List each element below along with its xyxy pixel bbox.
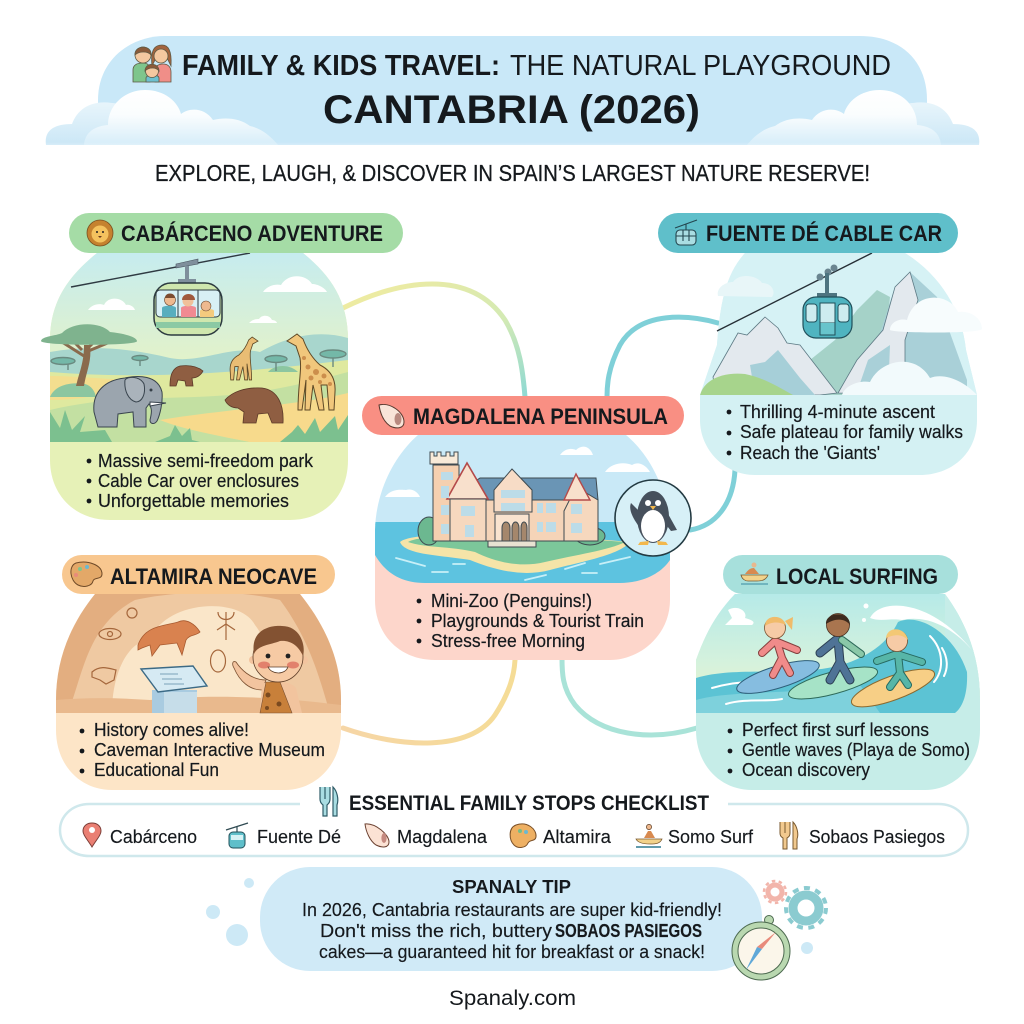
title line 1 light: THE NATURAL PLAYGROUND (510, 50, 891, 82)
scene: cave (56, 592, 341, 713)
icon: big bear (225, 388, 283, 423)
clouds: banner right (747, 90, 979, 145)
heading pill: ALTAMIRA NEOCAVE (110, 564, 317, 589)
bullet list: Cable Car over enclosures (98, 471, 299, 491)
item: Magdalena: Magdalena (397, 827, 488, 847)
icon: gondola (717, 253, 872, 338)
title banner (40, 36, 985, 154)
tip text: In 2026, Cantabria restaurants are super kid-friendly! (302, 900, 722, 920)
item: Altamira (510, 824, 612, 847)
bullet list: Reach the 'Giants' (740, 443, 880, 463)
icon: surfer girl (762, 617, 797, 675)
heading pill (69, 213, 403, 253)
bullet list (727, 402, 963, 463)
bullet list: Massive semi-freedom park (98, 451, 314, 471)
icon: surfer boy (820, 614, 861, 680)
icon: big giraffe (287, 334, 335, 410)
bullet list (417, 591, 644, 651)
tip text: cakes—a guaranteed hit for breakfast or a snack! (319, 942, 705, 962)
icon: shell (379, 404, 404, 428)
heading pill (362, 396, 684, 435)
title line 2: CANTABRIA (2026) (323, 88, 700, 132)
bullet list: Stress-free Morning (431, 631, 585, 651)
icon: acacia tree (41, 324, 137, 386)
icon: penguin badge (615, 480, 691, 556)
item: Fuente Dé (226, 823, 341, 848)
cave symbols (92, 608, 235, 684)
icon: boat (741, 562, 768, 584)
bullet list: Thrilling 4-minute ascent (740, 402, 935, 422)
clouds: banner left (46, 90, 278, 145)
footer: Spanaly.com (449, 987, 576, 1010)
icon: caveman child (233, 626, 308, 713)
icon: surfboards (734, 654, 938, 714)
icon: family (133, 45, 171, 82)
scene: palace (370, 435, 691, 587)
panel: Fuente Dé Cable Car (658, 213, 982, 475)
scene: safari park (41, 253, 348, 442)
heading pill (658, 213, 958, 253)
clouds (718, 276, 774, 297)
panel: checklist (60, 787, 968, 856)
icon: compass (732, 916, 790, 980)
panel: Cabárceno Adventure (41, 213, 403, 520)
panel: Local Surfing (696, 555, 980, 790)
icon: cutlery (320, 787, 338, 816)
connector lines (343, 284, 735, 743)
panel: Spanaly tip (206, 867, 826, 980)
heading pill: MAGDALENA PENINSULA (413, 404, 668, 429)
item: Sobaos Pasiegos: Sobaos Pasiegos (809, 827, 945, 847)
icon: gears (764, 881, 826, 928)
icon: cable car (71, 253, 250, 335)
bullet list: Ocean discovery (742, 760, 870, 780)
item: Sobaos Pasiegos (780, 822, 945, 849)
item: Altamira: Altamira (543, 827, 612, 847)
title line 1: FAMILY & KIDS TRAVEL: (182, 50, 500, 82)
bullet list (80, 720, 325, 780)
heading pill: LOCAL SURFING (776, 564, 938, 589)
tip heading: SPANALY TIP (452, 877, 571, 897)
icon: small bear (170, 366, 203, 386)
decorative bubbles (206, 878, 813, 954)
item: Fuente Dé: Fuente Dé (257, 827, 341, 847)
bullet list: Unforgettable memories (98, 491, 289, 511)
icon: lion (87, 220, 113, 246)
tip text: SOBAOS PASIEGOS (555, 921, 702, 941)
heading pill: CABÁRCENO ADVENTURE (121, 221, 383, 246)
bullet list: Gentle waves (Playa de Somo) (742, 740, 970, 760)
bullet list (728, 720, 970, 780)
bullet list: History comes alive! (94, 720, 249, 740)
item: Somo Surf: Somo Surf (668, 827, 754, 847)
icon: small giraffe (230, 337, 258, 380)
heading pill (723, 555, 958, 594)
bullet list: Safe plateau for family walks (740, 422, 963, 442)
icon: bison painting (138, 621, 200, 656)
item: Magdalena (365, 824, 488, 847)
scene: surf (696, 594, 980, 714)
item: Cabárceno (83, 823, 197, 847)
item: Somo Surf (636, 824, 754, 847)
icon: palette (71, 562, 102, 586)
heading pill (62, 555, 335, 594)
bullet list: Perfect first surf lessons (742, 720, 929, 740)
icon: surfer toddler (877, 629, 922, 687)
icon: elephant (94, 376, 166, 427)
panel: Altamira Neocave (56, 555, 341, 790)
tip text: Don't miss the rich, buttery (320, 921, 552, 941)
icon: info kiosk (141, 666, 207, 713)
bullet list: Caveman Interactive Museum (94, 740, 325, 760)
panel: Magdalena Peninsula (362, 396, 691, 660)
heading pill: FUENTE DÉ CABLE CAR (706, 221, 942, 246)
bullet list: Educational Fun (94, 760, 219, 780)
scene: mountains (700, 253, 982, 395)
checklist heading: ESSENTIAL FAMILY STOPS CHECKLIST (349, 792, 709, 815)
subtitle: EXPLORE, LAUGH, & DISCOVER IN SPAIN’S LARGEST NATURE RESERVE! (155, 160, 870, 186)
bullet list: Mini-Zoo (Penguins!) (431, 591, 592, 611)
item: Cabárceno: Cabárceno (110, 827, 197, 847)
icon: cable car (675, 220, 697, 245)
bullet list: Playgrounds & Tourist Train (431, 611, 644, 631)
bullet list (87, 451, 314, 511)
tip text (302, 900, 722, 962)
icon: palace (418, 452, 605, 547)
